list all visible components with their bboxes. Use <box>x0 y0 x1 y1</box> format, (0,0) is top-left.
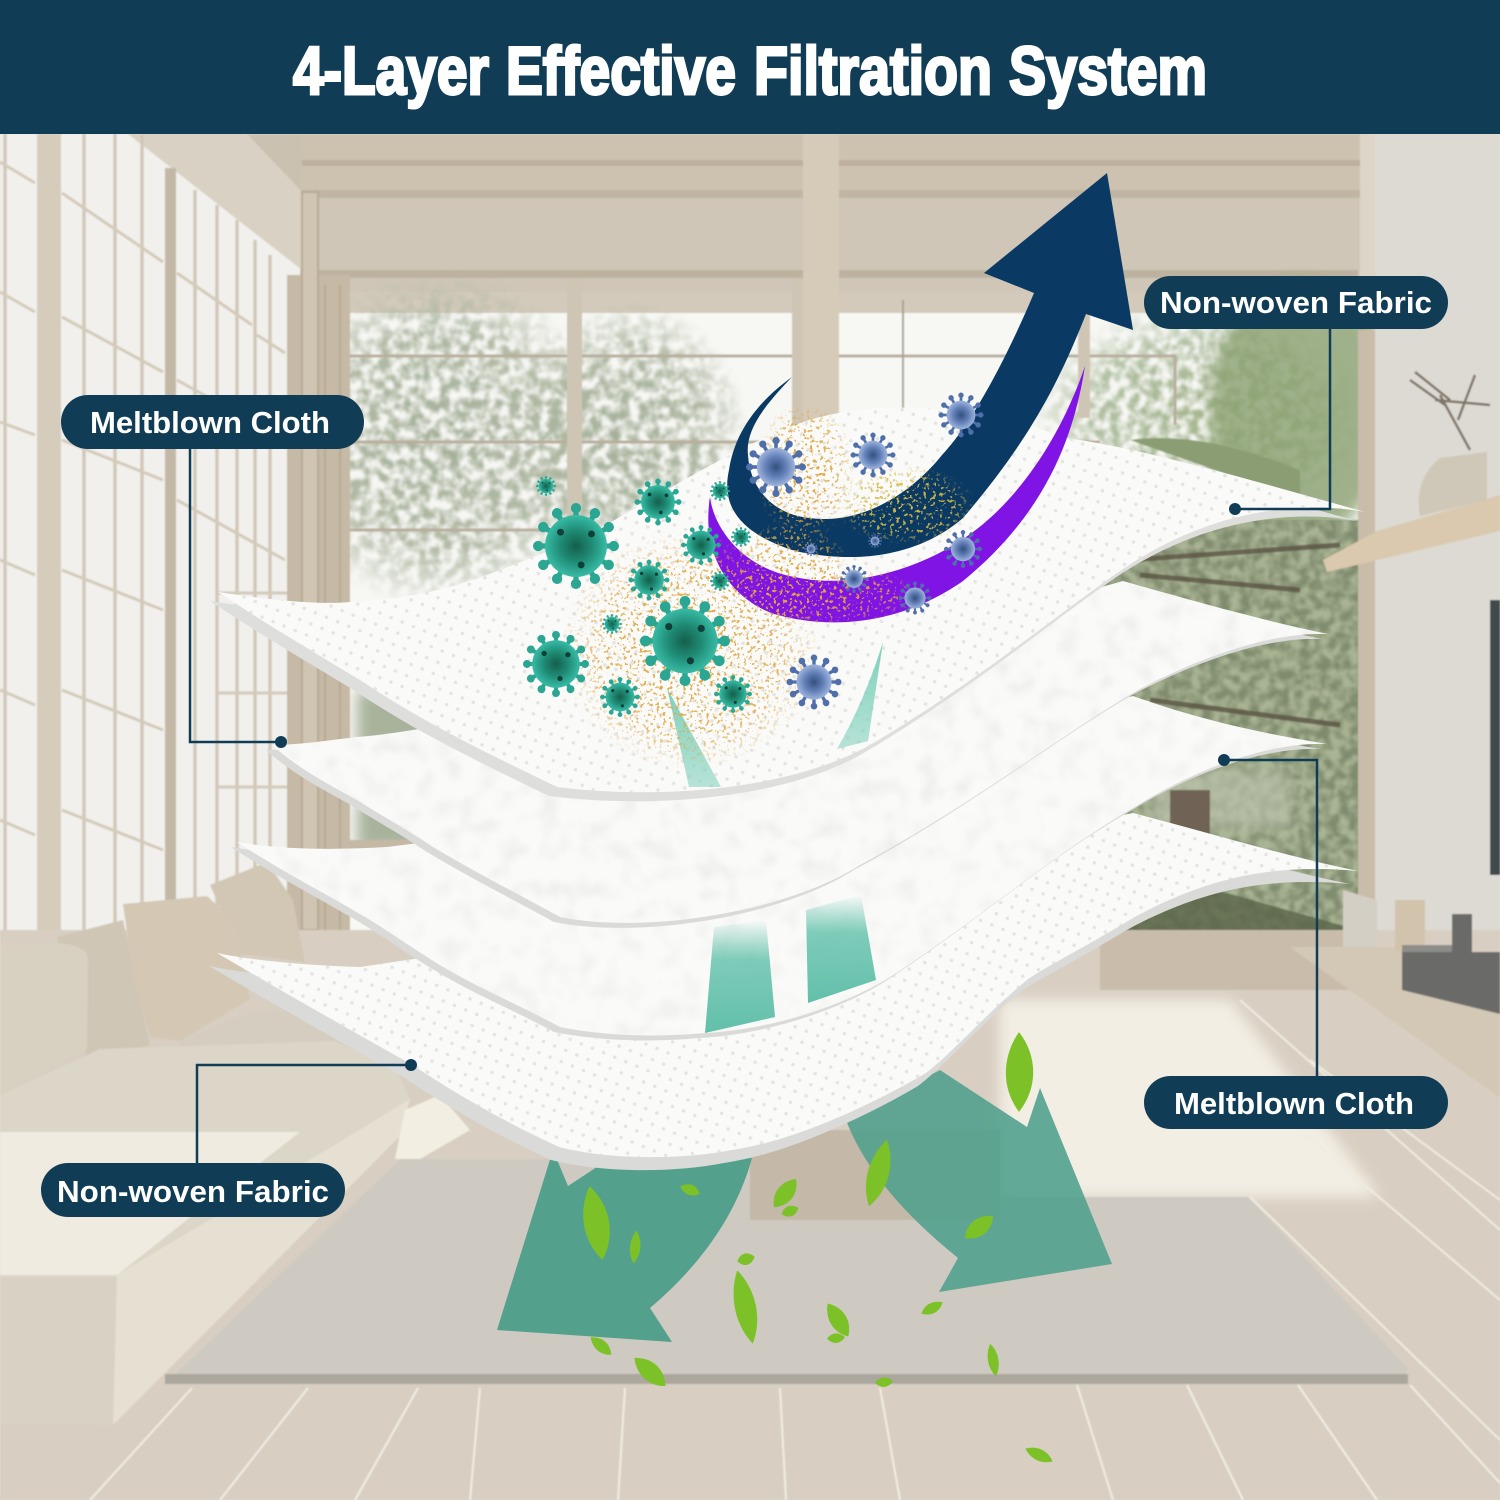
title <box>293 33 1207 109</box>
callout: meltblown cloth left <box>61 395 364 748</box>
blue virus cluster <box>746 393 983 709</box>
floor rug <box>165 1159 1408 1384</box>
arrow: clean air out right <box>846 1070 1112 1292</box>
right wall and shelf <box>1323 134 1500 964</box>
ceiling and beam <box>300 134 1360 294</box>
title: Filtration <box>754 33 992 109</box>
arrow: clean air out left <box>497 1150 752 1342</box>
rug edge <box>165 1374 1408 1384</box>
layer 1: non-woven fabric <box>210 408 1365 801</box>
purple filter swoosh <box>708 366 1085 622</box>
navy air arrow <box>727 173 1133 557</box>
callout: meltblown cloth right: Meltblown Cloth <box>1174 1086 1414 1121</box>
airflow band right <box>806 895 876 1003</box>
left shoji wall <box>0 134 350 938</box>
airflow band left <box>705 920 775 1033</box>
callout: non-woven fabric bottom left <box>41 1059 417 1217</box>
sofa <box>0 862 470 1425</box>
falling leaves <box>578 1032 1055 1466</box>
layer 4: non-woven fabric <box>209 813 1358 1170</box>
title: Effective <box>506 33 736 109</box>
callout: non-woven fabric bottom left: Non-woven Fabric <box>57 1174 329 1209</box>
green virus cluster <box>523 476 752 717</box>
callout: non-woven fabric top right: Non-woven Fabric <box>1160 285 1432 320</box>
callout: meltblown cloth left: Meltblown Cloth <box>90 405 330 440</box>
callout: non-woven fabric top right <box>1144 276 1448 515</box>
title: 4-Layer <box>293 33 489 109</box>
wooden floor <box>0 930 1500 1500</box>
title: System <box>1009 33 1207 109</box>
tv console <box>1290 890 1500 1098</box>
header band <box>0 0 1500 134</box>
callout: meltblown cloth right <box>1144 754 1448 1129</box>
side table <box>750 1130 1000 1220</box>
garden windows <box>270 134 1390 950</box>
airflow spike left <box>667 688 721 787</box>
airflow spike right <box>837 642 883 749</box>
layer 3: meltblown cloth <box>231 696 1327 1040</box>
layer 2: meltblown cloth <box>266 581 1328 928</box>
dust particles <box>560 400 975 770</box>
